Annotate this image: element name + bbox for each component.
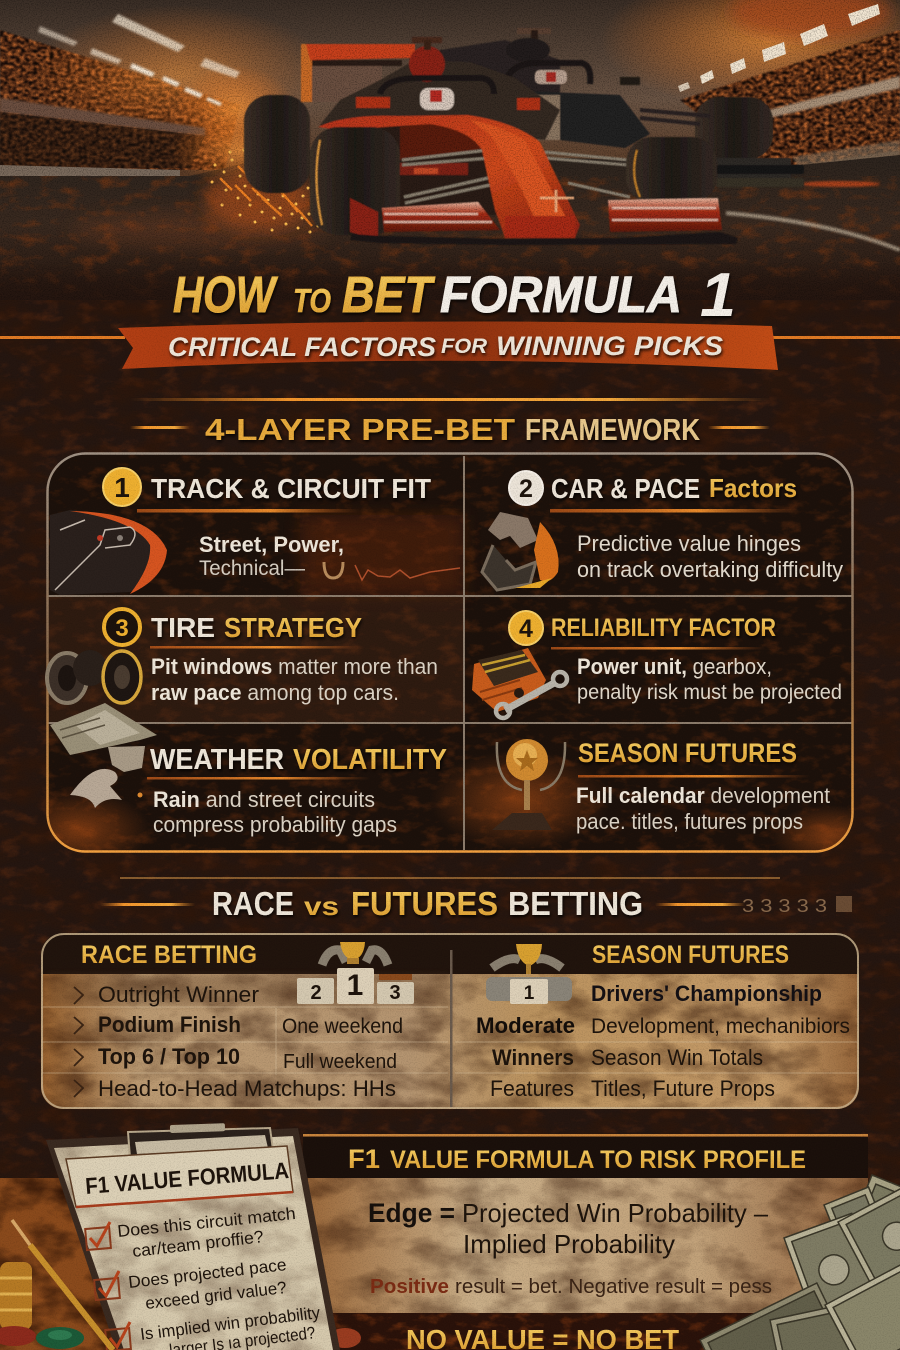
icon: coins and chips [0, 1262, 361, 1349]
cell 6: season futures [492, 738, 830, 834]
icon: trophy [492, 739, 565, 830]
clip [128, 1123, 273, 1158]
stadium lights right [678, 4, 880, 92]
cell 2: car and pace: on track overtaking difficulty [577, 557, 843, 582]
icon: circuit map [50, 510, 167, 595]
cell 4: reliability factor: penalty risk must be projected [577, 681, 842, 704]
badge 2 [509, 471, 543, 505]
subtitle ribbon: CRITICAL FACTORS [168, 332, 436, 362]
badge 4: 4 [519, 615, 533, 643]
icon: storm debris [70, 746, 145, 808]
section heading: race vs futures: RACE [212, 885, 294, 922]
subtitle ribbon [0, 321, 900, 370]
formula: Projected Win Probability – [462, 1198, 769, 1228]
heading [150, 744, 447, 776]
check item 2: Does projected pace [127, 1255, 287, 1292]
season futures column [476, 941, 850, 1101]
heading: VOLATILITY [293, 744, 447, 776]
icon: pile of cash [700, 1175, 900, 1350]
section heading: framework: FRAMEWORK [525, 412, 701, 447]
text: Street, Power, [199, 532, 344, 557]
heading: Factors [709, 473, 797, 503]
text: Predictive value hinges [577, 531, 801, 556]
icon: car parts [482, 512, 559, 590]
season futures column: Season Win Totals [591, 1045, 763, 1070]
race betting column: Podium Finish [98, 1012, 241, 1037]
season futures column: Winners [492, 1045, 574, 1070]
heading [551, 473, 797, 504]
text: Pit windows matter more than [151, 654, 438, 679]
heading: TIRE [151, 612, 215, 643]
cell 2: car and pace [482, 471, 843, 590]
race betting column: Top 6 / Top 10 [98, 1044, 240, 1069]
panel: value formula [303, 1134, 868, 1350]
panel: betting comparison table [41, 933, 859, 1109]
check item 1: Does this circuit match [116, 1204, 296, 1241]
section heading: race vs futures: BETTING [508, 885, 643, 922]
badge 2: 2 [519, 475, 533, 503]
podium icon: 1 [347, 969, 363, 1002]
podium icon: 2 [310, 982, 322, 1004]
badge 3: 3 [115, 615, 129, 642]
heading: RELIABILITY FACTOR [551, 614, 776, 642]
icon: pen [12, 1220, 113, 1350]
heading: TRACK & CIRCUIT FIT [151, 473, 431, 504]
cell 3: tire strategy: raw pace among top cars. [151, 680, 399, 705]
title: 1 [700, 261, 736, 330]
race betting column: Full weekend [283, 1051, 397, 1073]
icon: tires and notebook [47, 650, 157, 755]
heading: SEASON FUTURES [592, 941, 789, 969]
chevrons [74, 987, 83, 1097]
clipboard checklist [46, 1123, 340, 1350]
section heading: framework [130, 398, 770, 447]
front left tyre [310, 127, 400, 235]
heading: SEASON FUTURES [578, 738, 797, 768]
text: Rain and street circuits [153, 787, 375, 812]
heading: WEATHER [150, 744, 284, 776]
title: BET [342, 266, 435, 323]
heading: F1 [348, 1144, 380, 1174]
icon: toolbox and wrench [472, 648, 567, 718]
halo and driver [356, 78, 540, 110]
panel: 4-layer framework [45, 452, 854, 853]
cell 1: track and circuit fit [50, 468, 460, 595]
check item 1 [85, 1204, 296, 1261]
subtitle ribbon: WINNING PICKS [496, 331, 723, 361]
heading: RACE BETTING [81, 941, 257, 969]
cell 3: tire strategy [47, 609, 438, 755]
engine cover [320, 37, 560, 140]
section heading: race vs futures: 3 3 3 3 3 [742, 896, 827, 916]
check item 1: car/team proffie? [131, 1227, 265, 1261]
heading: CAR & PACE [551, 473, 700, 504]
heading: STRATEGY [224, 612, 362, 643]
heading [151, 612, 362, 643]
subtitle ribbon: FOR [441, 335, 488, 358]
title: FORMULA [440, 266, 682, 323]
heading: VALUE FORMULA TO RISK PROFILE [390, 1146, 806, 1174]
section heading: race vs futures: vs [304, 891, 339, 921]
front right tyre [626, 137, 717, 203]
podium icon [297, 942, 414, 1004]
checklist title [66, 1146, 293, 1207]
cell 4: reliability factor [472, 611, 842, 718]
formula [368, 1198, 769, 1259]
rows: Outright Winner [98, 982, 259, 1007]
cell 5: weather volatility [70, 744, 447, 837]
dark car [439, 28, 804, 188]
red car [244, 37, 738, 245]
title [173, 261, 736, 330]
badge 1: 1 [114, 472, 130, 503]
check item 2 [94, 1255, 288, 1313]
checklist title: F1 VALUE FORMULA [84, 1157, 290, 1199]
trophy podium icon [486, 944, 572, 1004]
race betting column [74, 941, 414, 1101]
season futures column: Titles, Future Props [591, 1076, 775, 1101]
badge 1 [103, 468, 141, 506]
formula: Implied Probability [463, 1229, 675, 1259]
cell 5: weather volatility: compress probability gaps [153, 812, 397, 837]
title: TO [293, 282, 331, 319]
nose and bodywork [318, 115, 580, 238]
formula: Edge = [368, 1198, 455, 1228]
check item 3: Is implied win probability [139, 1303, 322, 1344]
season futures column: Development, mechanibiors [591, 1015, 850, 1038]
icon: horseshoe and squiggle [324, 562, 460, 580]
title: HOW [173, 266, 278, 323]
text: Full calendar development [576, 783, 830, 808]
badge 4 [509, 611, 543, 645]
badge 3 [104, 609, 140, 645]
section heading: race vs futures [100, 877, 852, 922]
section heading: race vs futures: FUTURES [351, 885, 498, 922]
rows: Drivers' Championship [591, 981, 822, 1006]
race betting column: Head-to-Head Matchups: HHs [98, 1076, 396, 1101]
race betting column: One weekend [282, 1015, 403, 1038]
front wing [350, 198, 738, 245]
cell 1: track and circuit fit: Technical— [199, 557, 305, 580]
stadium lights left [38, 14, 240, 106]
text: Power unit, gearbox, [577, 654, 772, 679]
track surface [0, 150, 900, 300]
rear wing [301, 44, 415, 102]
decision rule: Positive [370, 1276, 449, 1298]
dust and sparks [170, 115, 318, 232]
cell 6: season futures: pace. titles, futures props [576, 809, 803, 834]
decision rule: result = bet. Negative result = pess [455, 1276, 772, 1298]
season futures column: Moderate [476, 1013, 575, 1038]
sidepod and suspension [320, 115, 630, 215]
section heading: framework: 4-LAYER PRE-BET [205, 412, 515, 447]
trophy podium icon: 1 [524, 983, 535, 1004]
sky and stadium [0, 0, 900, 180]
hero: race track scene [0, 0, 900, 300]
left rear tyre [244, 95, 310, 193]
check item 2: exceed grid value? [144, 1278, 288, 1313]
podium icon: 3 [389, 982, 401, 1004]
season futures column: Features [490, 1076, 574, 1101]
